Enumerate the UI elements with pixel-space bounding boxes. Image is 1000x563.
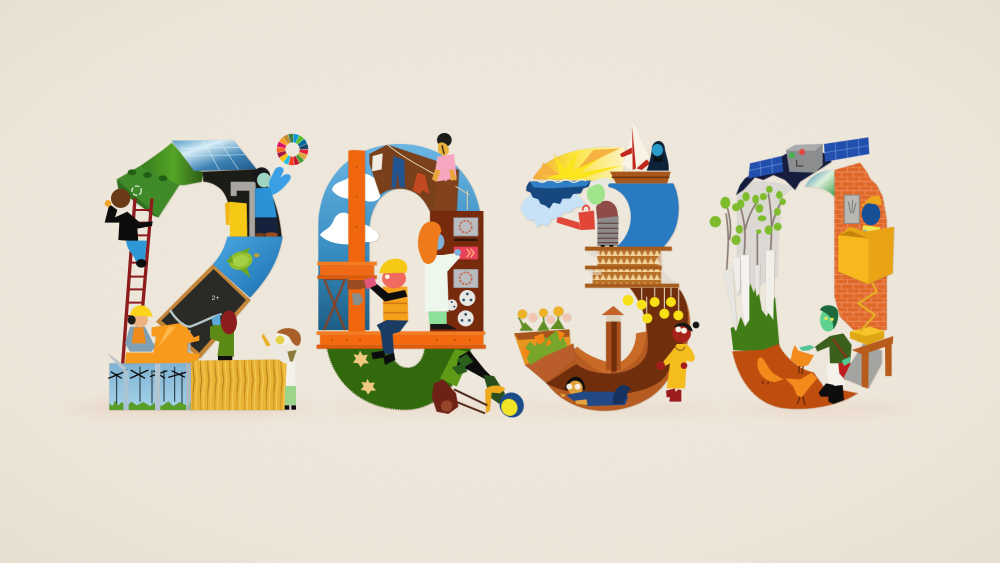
- sky behind trees: [737, 181, 795, 297]
- digit 0 (first): [317, 133, 528, 422]
- chickens: [757, 345, 817, 405]
- dark band with people at the pump: [203, 167, 291, 245]
- chalk text: 2+: [212, 295, 219, 302]
- person climbing the ladder: [105, 189, 153, 268]
- clothes line: [387, 145, 469, 210]
- big blue curve: [608, 183, 679, 247]
- woman with corn: [262, 328, 301, 410]
- grass and white tree guards: [723, 250, 779, 352]
- hay bale: [191, 359, 289, 410]
- turtle: [226, 247, 260, 278]
- person lying under the bowl: [560, 377, 631, 406]
- wind turbine field: [107, 330, 192, 410]
- grass bowl: [327, 348, 471, 409]
- trees: [710, 186, 786, 270]
- gardener with wheelbarrow: [432, 349, 528, 422]
- shelves of knitted pattern: [585, 247, 679, 288]
- control panel: [430, 211, 483, 333]
- sail boat: [610, 122, 671, 183]
- yellow figure: [229, 202, 247, 237]
- construction worker: [364, 259, 408, 365]
- ladder: [123, 186, 152, 364]
- hanging light bulbs: [623, 288, 683, 323]
- man with arms raised: [253, 167, 291, 237]
- man with hat feeding chickens: [799, 305, 852, 404]
- digit 2: [105, 140, 301, 410]
- digit 0 (second): [710, 137, 894, 409]
- table and scissor lift: [843, 282, 893, 388]
- brown bowl: [525, 288, 690, 411]
- brick wall: [834, 163, 887, 330]
- soil bowl: [733, 344, 857, 409]
- flower box: [514, 306, 576, 383]
- sunrise: [533, 147, 625, 181]
- man with pink shirt: [432, 133, 457, 210]
- worker in yellow lift: [838, 196, 894, 284]
- grandmother watering: [557, 178, 619, 247]
- chalkboard: [156, 264, 251, 358]
- water pump: [231, 182, 256, 245]
- green hill and lego block: [117, 143, 203, 217]
- orange machine: [125, 310, 222, 363]
- brown house wall with laundry: [369, 145, 469, 212]
- digit 3: [514, 122, 699, 411]
- SDG colour wheel: [276, 133, 309, 166]
- worker in yellow hard hat: [125, 305, 155, 352]
- sky with clouds: [318, 144, 480, 330]
- earth: [805, 170, 834, 197]
- orange steel beams: [317, 150, 486, 349]
- water with turtle: [213, 237, 283, 298]
- student in green: [210, 310, 237, 361]
- sea waves: [521, 180, 591, 227]
- satellite: [736, 137, 869, 195]
- scientist: [418, 222, 461, 329]
- solar panel: [172, 140, 257, 171]
- woman in yellow dress: [656, 322, 699, 402]
- ground shadow: [65, 402, 915, 414]
